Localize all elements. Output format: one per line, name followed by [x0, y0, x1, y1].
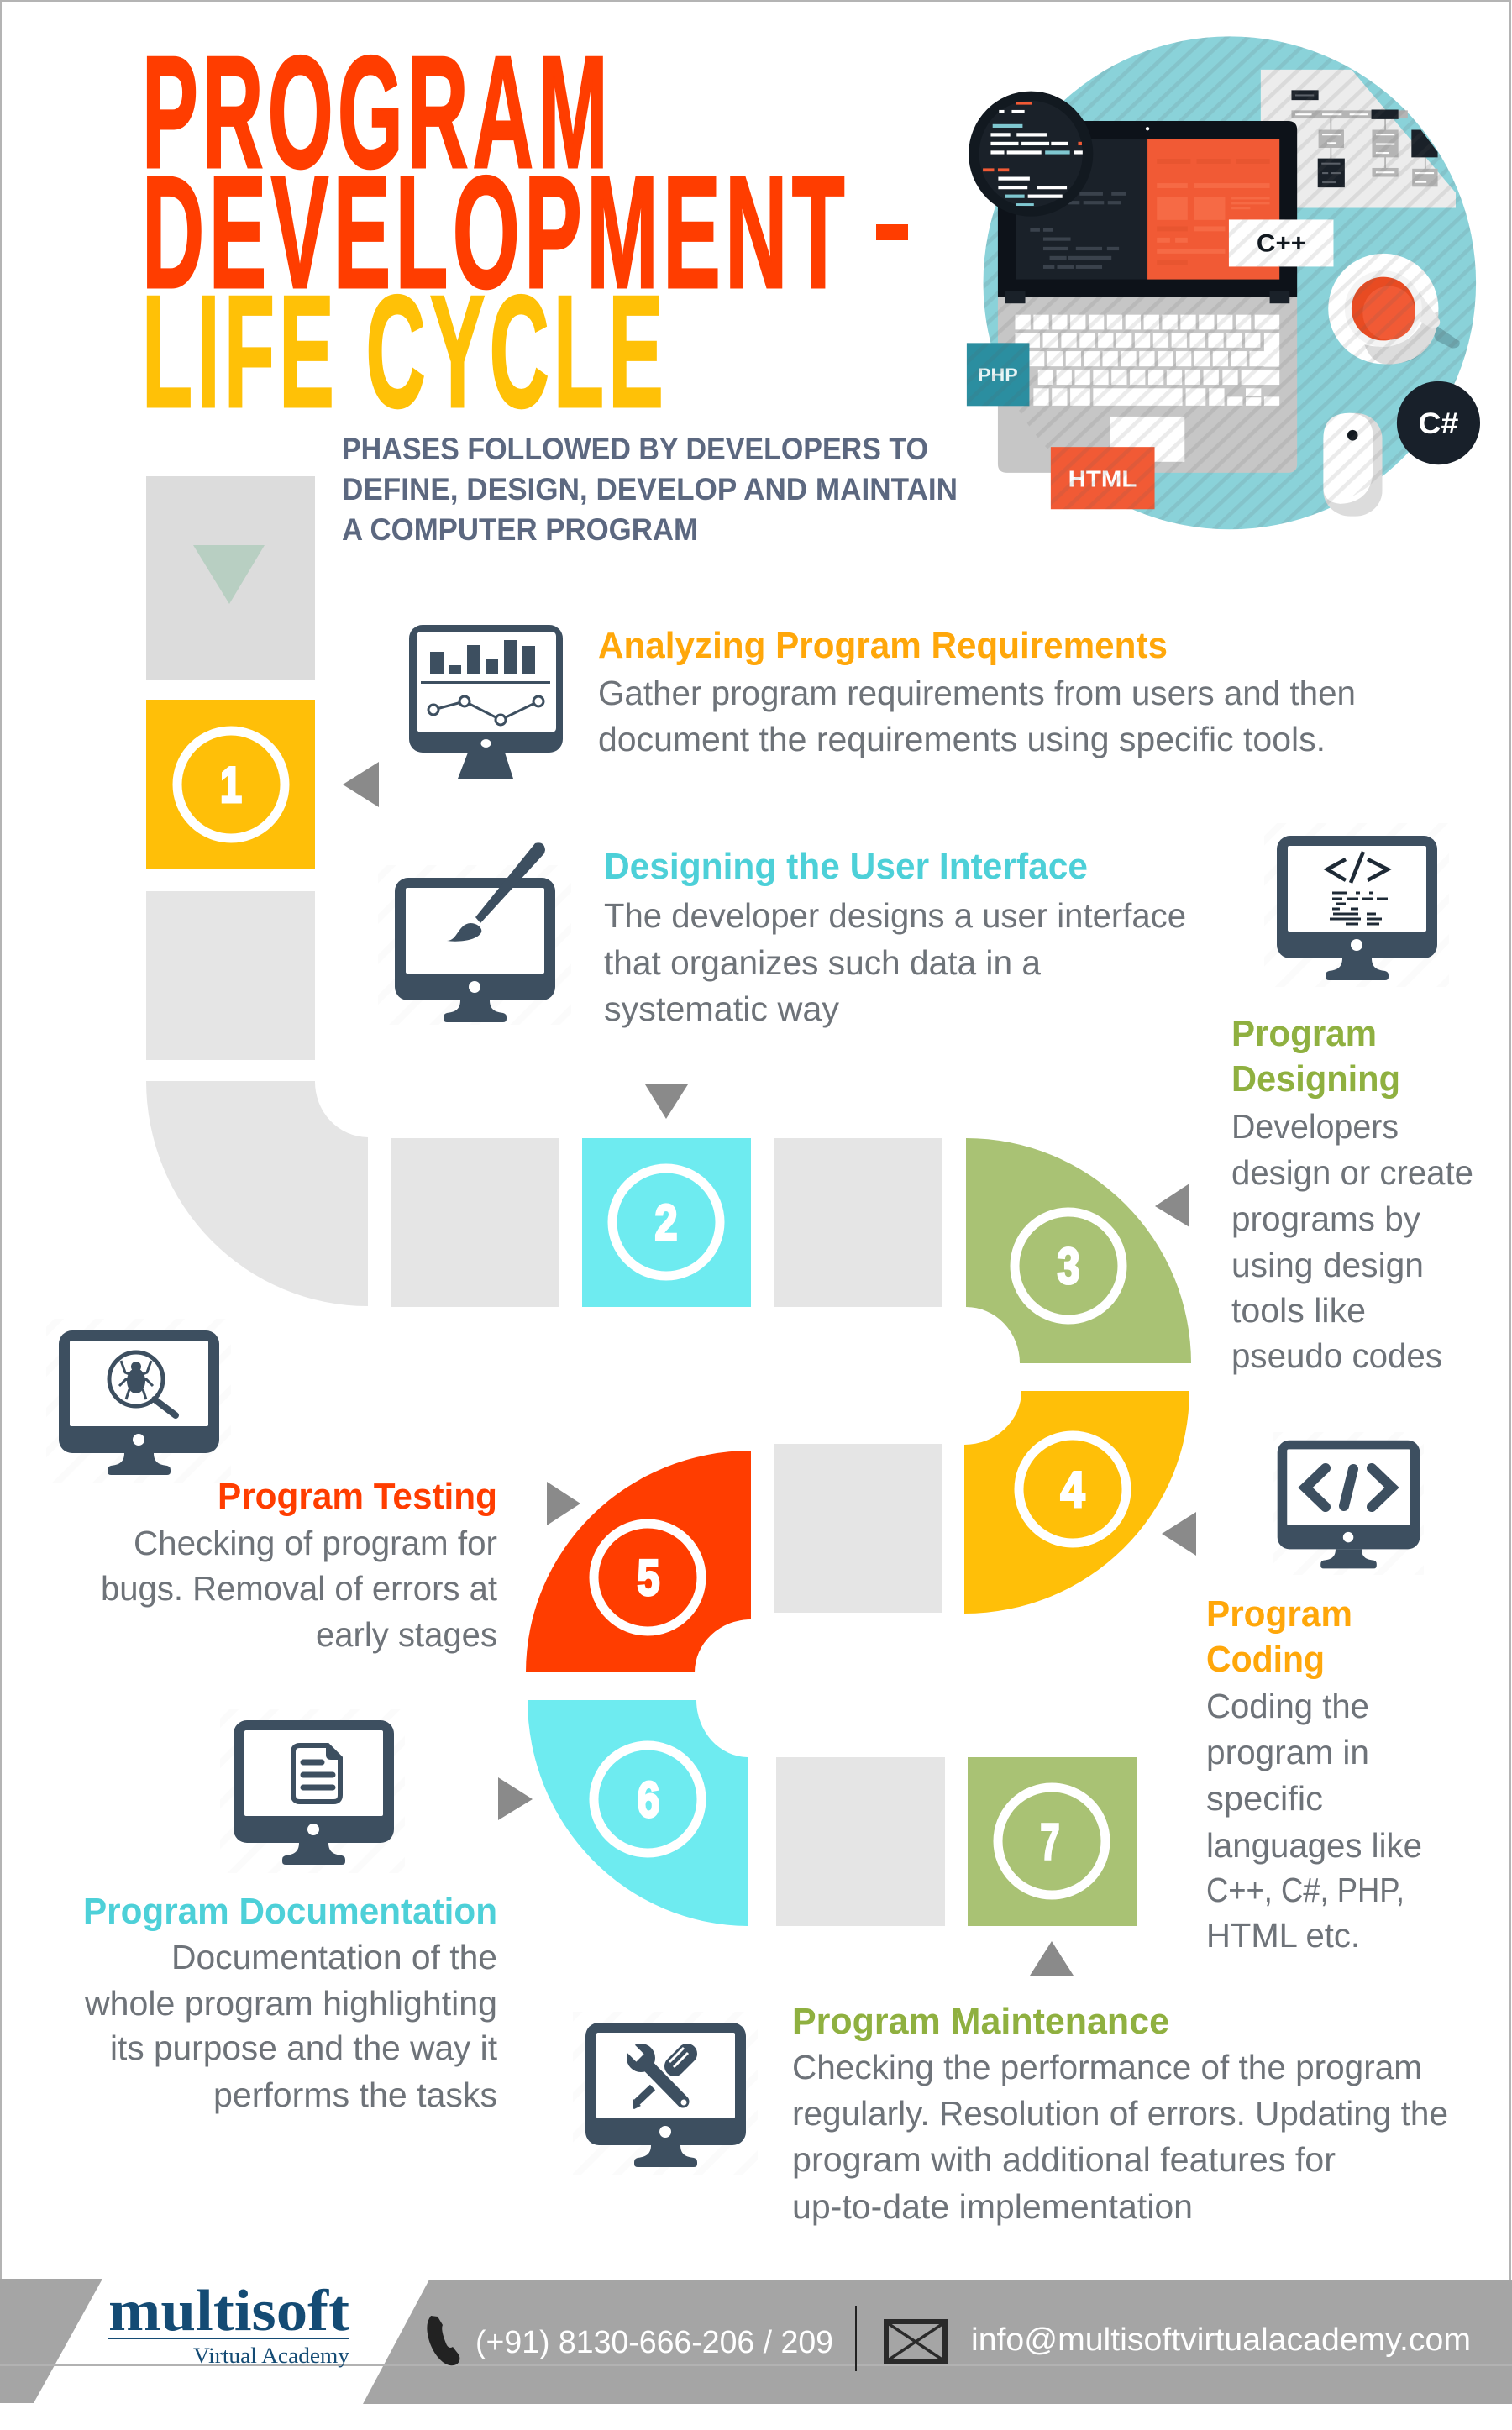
- label: C++: [1229, 219, 1333, 266]
- heading: step 3 text: using design: [1231, 1246, 1424, 1284]
- path block: [776, 1757, 945, 1926]
- step 3 block: [966, 1138, 1191, 1363]
- email: info@multisoftvirtualacademy.com: [971, 2322, 1471, 2358]
- heading: step 2 text: that organizes such data in a: [604, 943, 1041, 982]
- subtitle: A COMPUTER PROGRAM: [342, 512, 698, 547]
- icon: monitor with code tag: [1273, 1432, 1424, 1575]
- subtitle: DEFINE, DESIGN, DEVELOP AND MAINTAIN: [342, 472, 958, 506]
- heading: step 6 text: [83, 1891, 498, 2114]
- heading: step 5 text: Checking of program for: [134, 1524, 497, 1562]
- heading: step 5 text: Program Testing: [218, 1476, 497, 1517]
- step 7 block: [968, 1757, 1137, 1926]
- heading: step 4 text: HTML etc.: [1206, 1916, 1360, 1955]
- footer left band: [0, 2279, 102, 2403]
- step 5 block: [526, 1451, 751, 1672]
- coffee cup: [1328, 254, 1460, 365]
- step 4 block: 4: [1060, 1462, 1085, 1518]
- path block: [774, 1138, 942, 1307]
- heading: step 7 text: Program Maintenance: [792, 2001, 1169, 2042]
- step 1 block: 1: [220, 757, 242, 813]
- laptop base: [998, 297, 1297, 473]
- heading: step 4 text: [1206, 1593, 1422, 1955]
- step 2 block: [582, 1138, 751, 1307]
- icon: monitor with charts: [409, 625, 563, 779]
- badge: C#: [1397, 381, 1480, 464]
- heading: step 2 text: [604, 846, 1186, 1028]
- heading: step 3 text: Program: [1231, 1013, 1377, 1054]
- logo: Virtual Academy: [193, 2343, 349, 2368]
- heading: step 6 text: performs the tasks: [213, 2076, 497, 2114]
- step 6 block: 6: [637, 1771, 660, 1828]
- icon: monitor with paintbrush: [378, 842, 571, 1025]
- heading: step 3 text: Designing: [1231, 1058, 1400, 1100]
- heading: step 1 text: document the requirements using specific tools.: [598, 720, 1326, 758]
- arrow: step 7: [1030, 1941, 1074, 1976]
- arrow: step 2: [645, 1084, 688, 1119]
- magnifier with code: [969, 92, 1093, 217]
- heading: step 7 text: regularly. Resolution of errors. Updating the: [792, 2094, 1448, 2133]
- icon: phone: [427, 2316, 459, 2365]
- heading: step 6 text: Program Documentation: [83, 1891, 497, 1932]
- heading: step 1 text: Analyzing Program Requirements: [598, 625, 1168, 666]
- heading: step 2 text: systematic way: [604, 989, 840, 1028]
- mouse: [1323, 413, 1383, 517]
- path elbow: [146, 1081, 368, 1306]
- badge: C#: C#: [1418, 407, 1458, 440]
- step 3 block: 3: [1057, 1238, 1080, 1294]
- heading: step 4 text: Coding: [1206, 1639, 1325, 1680]
- icon: monitor with tools: [573, 2012, 758, 2175]
- logo: [108, 2279, 349, 2368]
- logo: multisoft: [108, 2279, 349, 2343]
- heading: step 4 text: program in: [1206, 1733, 1369, 1771]
- title: LIFE CYCLE: [142, 263, 668, 441]
- heading: step 6 text: its purpose and the way it: [110, 2028, 498, 2067]
- label: PHP: PHP: [978, 365, 1018, 386]
- arrow: step 5: [547, 1482, 580, 1525]
- heading: step 6 text: whole program highlighting: [84, 1984, 497, 2023]
- heading: step 3 text: programs by: [1231, 1199, 1420, 1238]
- step 4 block: [964, 1391, 1189, 1614]
- heading: step 3 text: [1231, 1013, 1473, 1375]
- label: HTML: HTML: [1068, 466, 1137, 492]
- arrow: step 6: [498, 1777, 533, 1820]
- heading: step 4 text: Program: [1206, 1593, 1352, 1635]
- title: DEVELOPMENT: [142, 144, 849, 322]
- step 1 block: [146, 700, 315, 869]
- heading: step 5 text: [101, 1476, 498, 1654]
- step 6 block: [528, 1700, 748, 1926]
- label: PHP: [967, 343, 1029, 406]
- heading: step 4 text: Coding the: [1206, 1687, 1369, 1725]
- path block: [391, 1138, 559, 1307]
- illustration: laptop with programming languages: [966, 36, 1480, 529]
- heading: step 7 text: [792, 2001, 1448, 2226]
- step 7 block: 7: [1040, 1813, 1060, 1870]
- heading: step 7 text: Checking the performance of the program: [792, 2048, 1422, 2086]
- path block: [146, 891, 315, 1060]
- subtitle: PHASES FOLLOWED BY DEVELOPERS TO: [342, 432, 928, 466]
- icon: monitor with code page: [1264, 823, 1449, 987]
- heading: step 7 text: up-to-date implementation: [792, 2187, 1193, 2226]
- phone number: (+91) 8130-666-206 / 209: [475, 2325, 833, 2360]
- start block with triangle: [146, 476, 315, 680]
- flowchart paper: [1261, 70, 1456, 208]
- icon: monitor with bug magnifier: [46, 1319, 231, 1483]
- footer: [0, 2279, 1512, 2404]
- heading: step 1 text: Gather program requirements from users and then: [598, 674, 1356, 712]
- arrow: step 3: [1155, 1184, 1189, 1227]
- step 2 block: 2: [655, 1194, 677, 1251]
- icon: monitor with document: [220, 1709, 405, 1873]
- icon: envelope: [886, 2322, 945, 2362]
- heading: step 3 text: design or create: [1231, 1153, 1473, 1192]
- label: HTML: [1051, 447, 1155, 509]
- arrow: step 4: [1162, 1512, 1196, 1556]
- title: PROGRAM: [142, 24, 612, 202]
- heading: step 2 text: Designing the User Interface: [604, 846, 1088, 887]
- heading: step 1 text: [598, 625, 1356, 758]
- heading: step 4 text: specific: [1206, 1779, 1323, 1818]
- step 5 block: 5: [637, 1550, 660, 1606]
- path block: [774, 1444, 942, 1613]
- arrow: step 1: [343, 762, 379, 807]
- heading: step 3 text: tools like: [1231, 1291, 1366, 1330]
- title: [142, 24, 908, 441]
- footer right band: [363, 2280, 1512, 2404]
- laptop screen: [998, 121, 1297, 303]
- subtitle: [342, 432, 958, 547]
- heading: step 6 text: Documentation of the: [171, 1938, 497, 1976]
- heading: step 4 text: languages like: [1206, 1826, 1422, 1865]
- heading: step 5 text: early stages: [316, 1615, 497, 1654]
- heading: step 5 text: bugs. Removal of errors at: [101, 1569, 498, 1608]
- heading: step 4 text: C++, C#, PHP,: [1206, 1871, 1404, 1909]
- heading: step 7 text: program with additional features for: [792, 2140, 1336, 2179]
- label: C++: C++: [1257, 231, 1306, 258]
- heading: step 3 text: Developers: [1231, 1107, 1399, 1146]
- heading: step 3 text: pseudo codes: [1231, 1336, 1442, 1375]
- heading: step 2 text: The developer designs a user interface: [604, 896, 1186, 935]
